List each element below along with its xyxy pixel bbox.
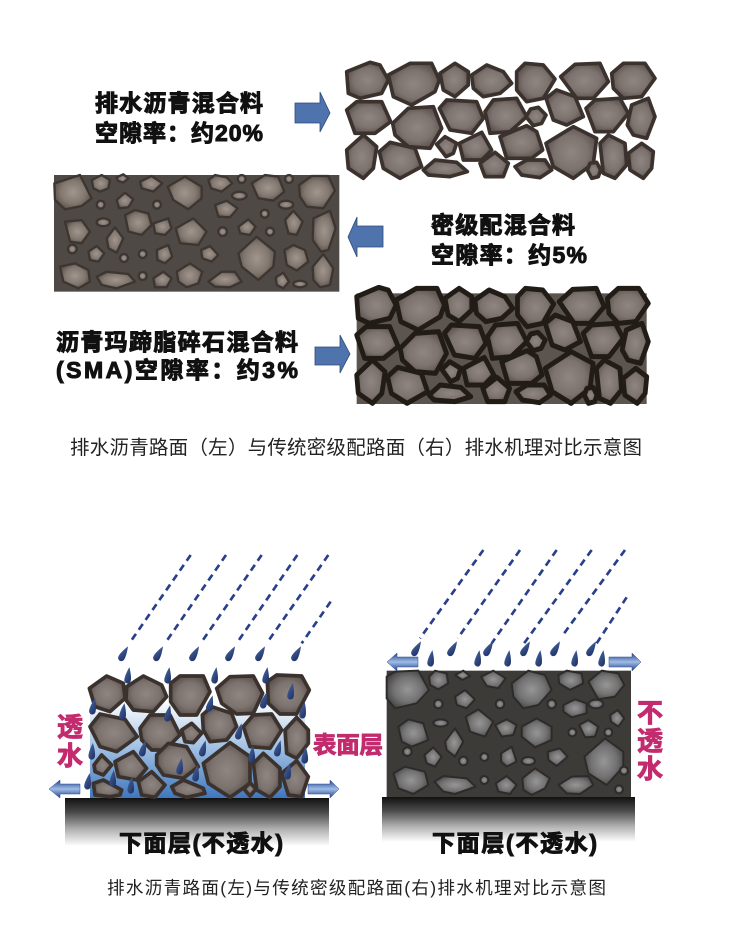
heading: SMA, void ratio 3%: 沥青玛蹄脂碎石混合料 — [56, 329, 298, 355]
arrow: runoff left — [387, 653, 418, 671]
panel: dense graded mix — [54, 174, 339, 292]
caption: lower: 排水沥青路面(左)与传统密级配路面(右)排水机理对比示意图 — [107, 878, 606, 898]
label: impermeable — [637, 698, 663, 784]
panel: left road stones — [89, 675, 309, 797]
label: permeable: 透 — [57, 712, 83, 742]
label: surface layer: 表面层 — [313, 732, 383, 758]
caption: upper: 排水沥青路面（左）与传统密级配路面（右）排水机理对比示意图 — [70, 437, 642, 459]
panel: right road — [387, 671, 631, 797]
label: permeable: 水 — [57, 741, 83, 771]
heading: drainage asphalt mix, void ratio 20%: 排水沥青混合料 — [95, 90, 263, 116]
label: lower layer left: 下面层(不透水) — [119, 830, 283, 856]
heading: dense graded mix, void ratio 5%: 密级配混合料 — [431, 212, 575, 238]
panel: drainage asphalt mix stones — [347, 62, 655, 178]
panel: water below left stones — [90, 700, 305, 798]
heading: drainage asphalt mix, void ratio 20%: 空隙率：约20% — [95, 120, 263, 146]
panel: SMA mix — [357, 287, 648, 404]
arrow: runoff right — [609, 653, 641, 671]
arrow: water out right — [308, 780, 339, 798]
drops: left road — [84, 645, 309, 794]
heading: SMA, void ratio 3%: (SMA)空隙率：约3% — [56, 357, 298, 383]
label: lower layer right: 下面层(不透水) — [432, 830, 597, 856]
rain: left — [129, 555, 331, 643]
heading: drainage asphalt mix, void ratio 20% — [95, 90, 263, 146]
label: permeable — [57, 712, 83, 771]
label: impermeable: 水 — [637, 754, 663, 784]
arrow: water out left — [49, 780, 80, 798]
heading: SMA, void ratio 3% — [56, 329, 298, 383]
heading: dense graded mix, void ratio 5%: 空隙率：约5% — [431, 242, 587, 268]
drops: right road — [410, 640, 607, 667]
label: impermeable: 不 — [637, 698, 663, 728]
label: impermeable: 透 — [637, 726, 663, 756]
ground layer: right — [382, 797, 635, 842]
arrow: right to drainage asphalt — [295, 92, 330, 132]
heading: dense graded mix, void ratio 5% — [431, 212, 587, 268]
arrow: left to dense graded mix — [348, 217, 383, 257]
arrow: right to SMA — [315, 335, 350, 373]
ground layer: left — [65, 798, 329, 846]
rain: right — [420, 550, 627, 647]
